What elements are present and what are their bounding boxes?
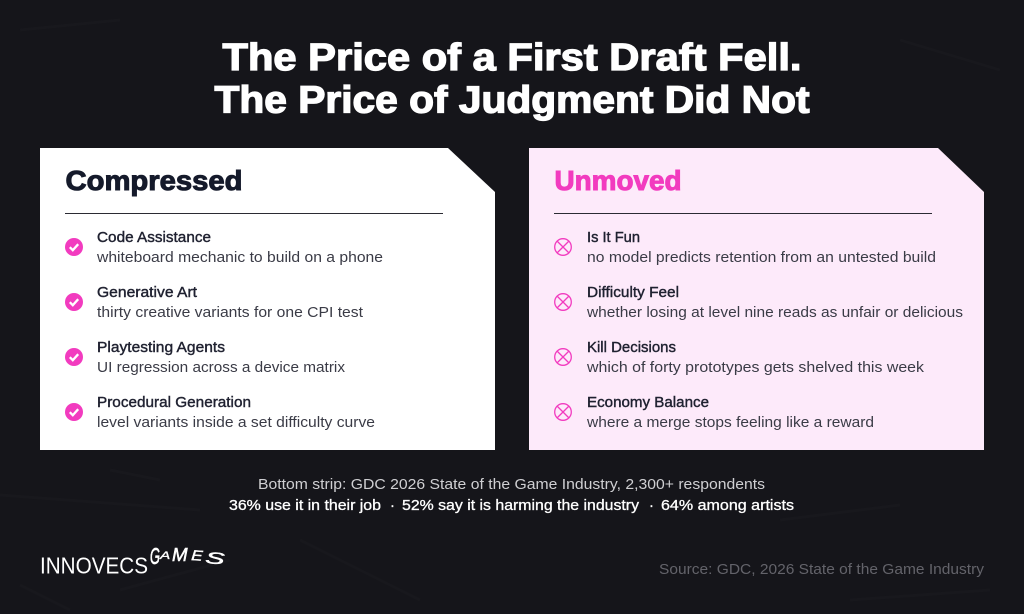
title: The Price of Judgment Did Not [214, 80, 810, 122]
heading: unmoved: Unmoved [554, 165, 682, 196]
item: code assistance: whiteboard mechanic to build on a phone [96, 250, 383, 266]
title: The Price of a First Draft Fell. [222, 37, 802, 79]
item: code assistance [65, 230, 383, 266]
item: difficulty feel: whether losing at level nine reads as unfair or delicious [586, 305, 963, 321]
bottom strip text: 36% use it in their job [229, 498, 381, 514]
bottom strip text: 64% among artists [661, 498, 794, 514]
logo: A [159, 549, 170, 561]
bottom strip text [229, 477, 794, 514]
item: generative art: thirty creative variants for one CPI test [97, 305, 363, 321]
panel: unmoved [529, 148, 984, 450]
item: kill decisions [555, 340, 925, 376]
bottom strip text: · [390, 498, 395, 514]
logo: INNOVECS [40, 552, 148, 578]
item: code assistance: Code Assistance [97, 230, 211, 246]
item: playtesting agents: Playtesting Agents [97, 340, 225, 356]
logo: E [191, 548, 204, 564]
source: Source: GDC, 2026 State of the Game Industry [659, 562, 985, 578]
item: playtesting agents: UI regression across a device matrix [97, 360, 346, 376]
bottom strip text: 52% say it is harming the industry [402, 498, 640, 514]
heading: compressed: Compressed [66, 165, 242, 196]
item: difficulty feel: Difficulty Feel [587, 285, 679, 301]
item: economy balance [555, 395, 874, 431]
logo: M [172, 544, 188, 565]
item: generative art: Generative Art [97, 285, 197, 301]
item: difficulty feel [555, 285, 963, 321]
item: procedural generation [65, 395, 375, 431]
item: economy balance: where a merge stops feeling like a reward [586, 415, 874, 431]
item: generative art [65, 285, 363, 321]
item: is it fun: no model predicts retention from an untested build [587, 250, 936, 266]
item: kill decisions: which of forty prototypes gets shelved this week [586, 360, 925, 376]
title [214, 37, 810, 122]
item: is it fun: Is It Fun [587, 230, 640, 246]
item: economy balance: Economy Balance [587, 395, 709, 411]
bottom strip text: · [649, 498, 654, 514]
item: procedural generation: Procedural Generation [97, 395, 251, 411]
bottom strip text: Bottom strip: GDC 2026 State of the Game Industry, 2,300+ respondents [258, 477, 765, 493]
item: procedural generation: level variants inside a set difficulty curve [97, 415, 375, 431]
item: kill decisions: Kill Decisions [587, 340, 676, 356]
logo: G [150, 543, 160, 569]
item: is it fun [555, 230, 936, 266]
logo: S [205, 549, 226, 568]
item: playtesting agents [65, 340, 346, 376]
logo [40, 543, 226, 578]
panel: compressed [40, 148, 495, 450]
